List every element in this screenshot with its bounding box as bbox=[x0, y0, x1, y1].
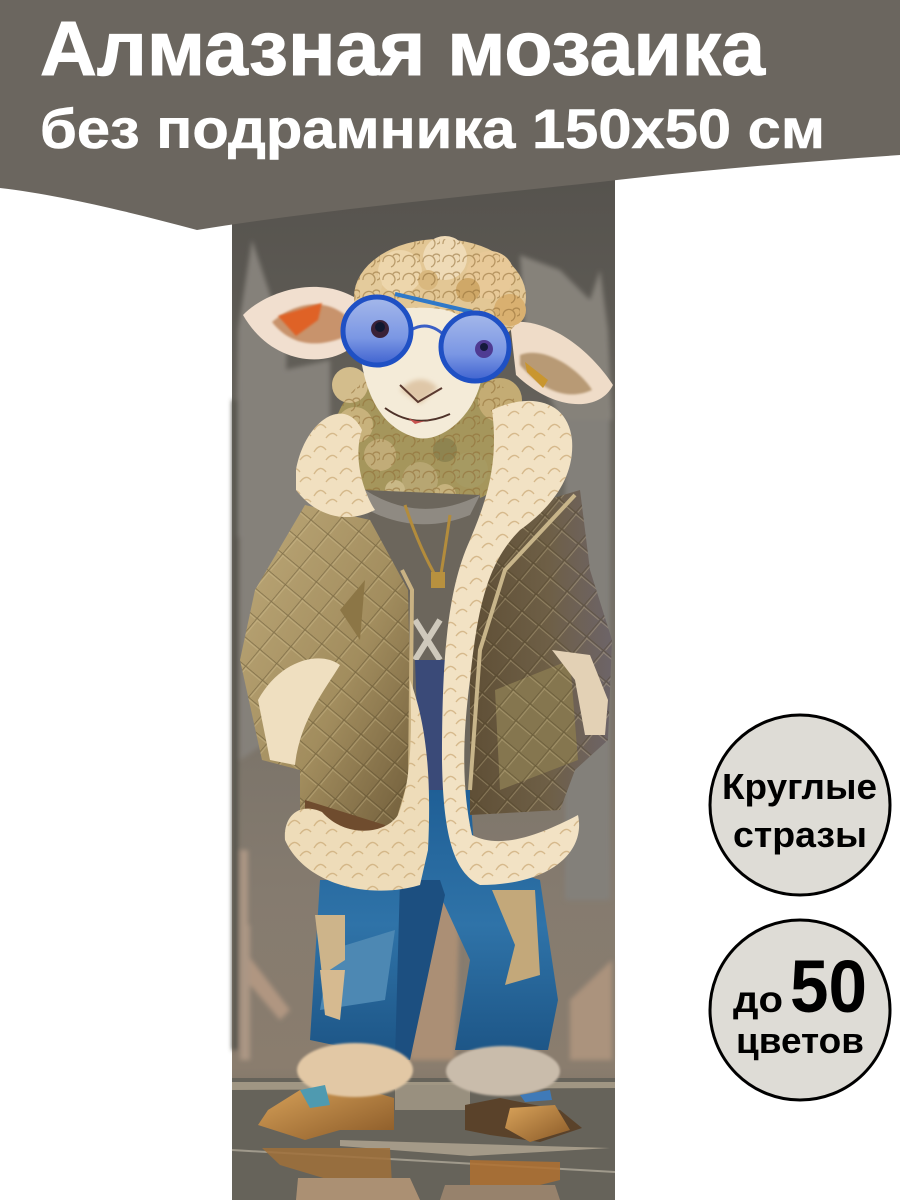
badge: up to 50 colours: цветов bbox=[736, 1020, 864, 1061]
top banner bbox=[0, 0, 900, 230]
subtitle: без подрамника 150х50 см bbox=[40, 97, 825, 160]
right jacket panel bbox=[470, 490, 612, 815]
right boot with fur bbox=[446, 1046, 582, 1142]
fur collar and cuffs bbox=[258, 401, 608, 891]
jeans bbox=[310, 790, 558, 1060]
artwork background bbox=[232, 180, 615, 1200]
badge: up to 50 colours: до bbox=[733, 979, 783, 1020]
wool on head and neck bbox=[332, 236, 526, 509]
picture panel: sheep artwork bbox=[232, 180, 615, 1200]
hoodie and chain bbox=[365, 490, 480, 800]
badge: round rhinestones: Круглые bbox=[722, 766, 877, 807]
left boot with fur bbox=[258, 1043, 413, 1140]
title: Алмазная мозаика bbox=[40, 6, 766, 92]
left ear bbox=[243, 287, 362, 359]
blue round glasses bbox=[343, 294, 509, 381]
face bbox=[360, 308, 483, 438]
left jacket panel bbox=[240, 505, 412, 865]
badge: round rhinestones bbox=[710, 715, 890, 895]
badge: round rhinestones: стразы bbox=[733, 814, 867, 855]
boot reflections bbox=[262, 1148, 560, 1200]
right ear bbox=[510, 322, 613, 404]
badge: up to 50 colours: 50 bbox=[790, 945, 867, 1028]
badge: up to 50 colours bbox=[710, 920, 890, 1100]
